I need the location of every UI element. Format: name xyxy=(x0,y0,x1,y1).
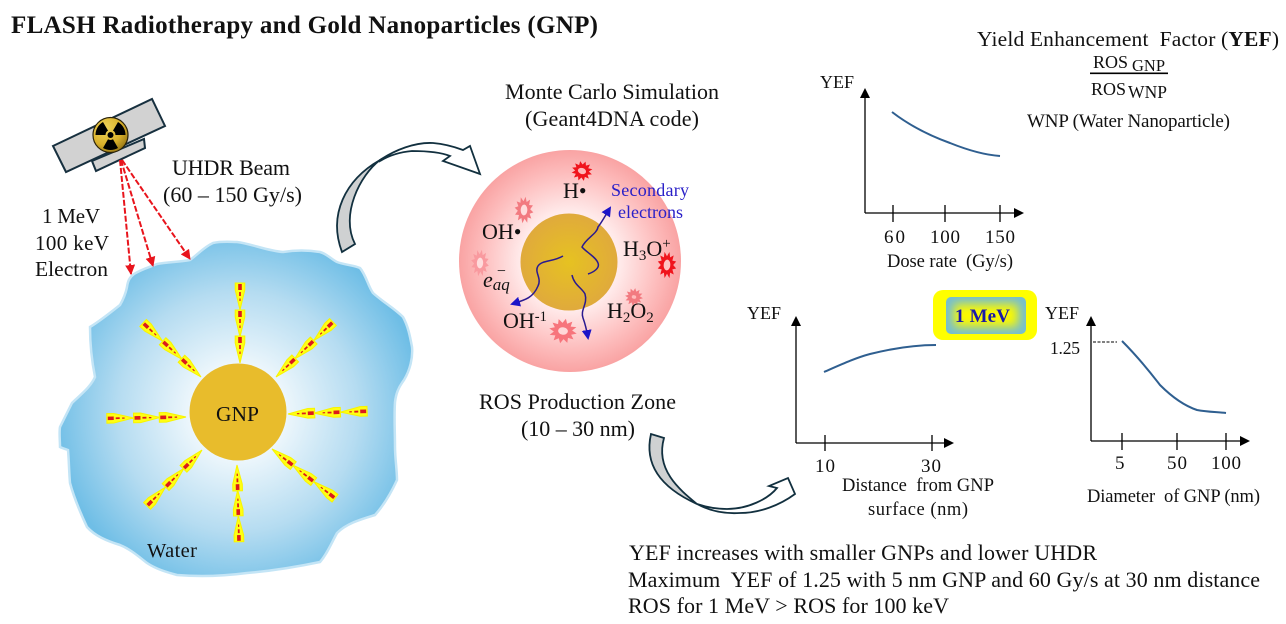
electron energy label: Electron xyxy=(35,257,108,281)
hydrogen peroxide label: 2 xyxy=(623,310,630,326)
chart: YEF vs distance: 10 xyxy=(815,456,835,477)
chart: YEF vs diameter: YEF xyxy=(1045,303,1079,323)
ROS zone caption: (10 – 30 nm) xyxy=(521,416,635,441)
beam label: (60 – 150 Gy/s) xyxy=(163,182,302,207)
hydrogen peroxide label: H xyxy=(607,298,623,323)
fraction: WNP xyxy=(1128,82,1167,102)
title: FLASH Radiotherapy and Gold Nanoparticles (GNP) xyxy=(11,12,598,39)
chart: YEF vs dose rate: 100 xyxy=(930,227,960,248)
water droplet with gold nanoparticle xyxy=(60,242,412,576)
chart: YEF vs diameter xyxy=(1045,303,1260,507)
chart: YEF vs diameter: 1.25 xyxy=(1050,338,1080,358)
electron energy label: 100 keV xyxy=(35,231,109,255)
conclusions text: ROS for 1 MeV > ROS for 100 keV xyxy=(628,593,949,618)
fraction xyxy=(1090,52,1168,102)
WNP note: WNP (Water Nanoparticle) xyxy=(1027,111,1230,132)
curve: distance xyxy=(824,345,936,372)
chart: YEF vs distance: Distance from GNP xyxy=(842,476,994,496)
water label: Water xyxy=(147,540,197,562)
hydrogen peroxide label: O xyxy=(630,298,646,323)
hydrated electron label: − xyxy=(496,263,507,280)
gold nanoparticle xyxy=(190,364,286,460)
hydronium label: + xyxy=(662,236,671,252)
electron energy label xyxy=(35,204,109,281)
curved arrow to simulation xyxy=(337,143,480,252)
beam label: UHDR Beam xyxy=(172,155,290,180)
simulation heading xyxy=(505,79,719,131)
reactive species bursts xyxy=(469,158,679,346)
hydronium label: 3 xyxy=(639,248,646,264)
fraction: ROS xyxy=(1091,79,1126,99)
curved arrow to charts xyxy=(649,434,795,513)
secondary electrons label: Secondary xyxy=(611,180,689,200)
chart: YEF vs distance: YEF xyxy=(747,303,781,323)
chart: YEF vs diameter: 50 xyxy=(1167,453,1187,474)
radiation source device xyxy=(53,99,165,172)
chart: YEF vs distance: surface (nm) xyxy=(868,500,968,520)
simulation heading: (Geant4DNA code) xyxy=(525,106,699,131)
hydroxide label: OH xyxy=(503,308,535,333)
beam label xyxy=(163,155,302,207)
chart: YEF vs dose rate: 150 xyxy=(985,227,1015,248)
hydrated electron label: aq xyxy=(493,275,510,294)
chart: YEF vs diameter: Diameter of GNP (nm) xyxy=(1087,487,1260,507)
device back plate xyxy=(92,139,145,171)
chart: YEF vs diameter: 5 xyxy=(1115,453,1124,474)
YEF heading: Yield Enhancement Factor (YEF) xyxy=(977,27,1279,51)
device main plate xyxy=(53,99,165,172)
water region xyxy=(60,242,412,576)
hydronium label: O xyxy=(646,236,662,261)
secondary electrons label: electrons xyxy=(618,202,683,222)
conclusions text: YEF increases with smaller GNPs and lower UHDR xyxy=(629,540,1097,565)
chart: YEF vs distance xyxy=(747,303,994,520)
badge: 1 MeV: 1 MeV xyxy=(955,306,1010,327)
hydroxide label: -1 xyxy=(535,309,547,325)
chart: YEF vs dose rate xyxy=(820,72,1016,272)
pink zone xyxy=(459,150,681,372)
GNP label: GNP xyxy=(216,402,259,426)
chart: YEF vs distance: 30 xyxy=(921,456,941,477)
ROS production sphere xyxy=(459,150,689,372)
electron beam arrows xyxy=(120,160,190,274)
chart: YEF vs dose rate: 60 xyxy=(884,227,905,248)
chart: YEF vs dose rate: YEF xyxy=(820,72,854,92)
OH radical: OH• xyxy=(482,219,521,244)
fraction: GNP xyxy=(1132,56,1165,75)
badge: 1 MeV xyxy=(933,290,1037,340)
YEF definition xyxy=(977,27,1279,132)
electron energy label: 1 MeV xyxy=(42,204,100,228)
hydrogen peroxide label: 2 xyxy=(646,310,654,326)
simulation heading: Monte Carlo Simulation xyxy=(505,79,719,104)
emission rays xyxy=(107,283,367,542)
conclusions text xyxy=(628,540,1260,618)
secondary electrons label xyxy=(611,180,689,222)
curve: dose rate xyxy=(892,112,1000,156)
fraction: ROS xyxy=(1093,52,1128,72)
conclusions text: Maximum YEF of 1.25 with 5 nm GNP and 60 Gy/s at 30 nm distance xyxy=(628,567,1260,592)
H radical: H• xyxy=(563,178,587,203)
gold core xyxy=(520,214,618,310)
secondary electron tracks xyxy=(512,208,610,338)
icon: radiation symbol xyxy=(93,118,128,152)
ROS zone caption: ROS Production Zone xyxy=(479,389,676,414)
chart: YEF vs diameter: 100 xyxy=(1211,453,1241,474)
curve: diameter xyxy=(1122,341,1226,413)
hydronium label: H xyxy=(623,236,639,261)
ROS zone caption xyxy=(479,389,676,441)
hydrated electron label: e xyxy=(483,267,493,292)
chart: YEF vs dose rate: Dose rate (Gy/s) xyxy=(887,252,1013,272)
